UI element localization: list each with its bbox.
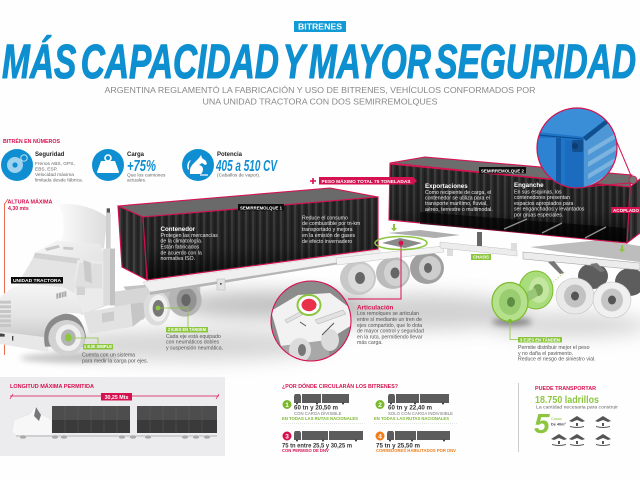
windshield [18, 258, 79, 288]
fairing [57, 204, 107, 248]
stat: carga: Que los camiones [127, 172, 166, 178]
text: contenedor: Protegen las mercancías [160, 233, 218, 239]
route 1: 1 [285, 402, 289, 409]
text: consumo: transportado y mejora [302, 227, 353, 233]
text: articulación: más carga. [357, 340, 383, 346]
stat: carga: +75% [127, 158, 156, 175]
label and text: 2 ejes en tándem: Cada eje está equipado [166, 334, 221, 340]
route 2: SOLO CON CARGA INDIVISIBLE [388, 411, 453, 416]
route 3: 75 tn entre 25,5 y 30,25 m [282, 442, 352, 450]
label and text: 3 ejes en tándem: Reduce el riesgo de siniestro vial. [518, 356, 596, 362]
height marker: altura máxima: ALTURA MÁXIMA [8, 198, 53, 206]
text: contenedor: Contenedor [160, 226, 196, 233]
route 1: EN TODAS LAS RUTAS NACIONALES [282, 416, 358, 421]
container 1 [118, 188, 378, 280]
weight label: peso máximo [310, 177, 417, 184]
text: exportaciones: transporte marítimo, fluvial, [425, 201, 488, 207]
heading: por dónde circularán: ¿POR DÓNDE CIRCULARÁN LOS BITRENES? [282, 382, 398, 390]
label and text: 1 eje simple: Cuenta con un sistema [82, 352, 135, 358]
green tandem axle [492, 271, 565, 340]
text: articulación: Articulación [357, 304, 394, 312]
text: articulación: en la ruta, permitiendo llevar [357, 334, 423, 340]
subtitle: ARGENTINA REGLAMENTÓ LA FABRICACIÓN Y USO DE BITRENES, VEHÍCULOS CONFORMADOS POR [104, 85, 536, 95]
panel: bitrén en números [1, 137, 278, 184]
stat: seguridad: Seguridad [35, 152, 65, 158]
label and text: 1 eje simple: para medir la carga por ejes. [82, 358, 148, 364]
route 1 [282, 394, 358, 421]
route 4: 4 [378, 433, 382, 440]
grille [0, 301, 11, 327]
stat: seguridad: Frenos ABS, GPS, [35, 161, 75, 167]
height marker: altura máxima: 4,30 mts [8, 206, 29, 212]
label: unidad tractora: UNIDAD TRACTORA [13, 278, 62, 283]
text: cantidad necesaria: La cantidad necesaria para construir [536, 404, 618, 410]
label: acoplado: ACOPLADO [613, 208, 640, 213]
height marker: altura máxima [4, 198, 53, 355]
subtitle [104, 85, 536, 106]
callout: articulación circle [270, 280, 352, 362]
stat: potencia: 405 a 510 CV [215, 158, 278, 175]
label and text: 2 ejes en tándem: con neumáticos dobles [166, 340, 219, 346]
ground shadows [20, 291, 640, 363]
tandem wheel front [143, 291, 170, 326]
container 2 [389, 157, 640, 243]
text: articulación: ejes compartido, que lo dota [357, 323, 422, 329]
stat: carga [92, 149, 166, 184]
cab body [20, 241, 108, 315]
route 2 [374, 394, 453, 421]
stat: seguridad: EBS, ESP. [35, 166, 58, 172]
hood [0, 283, 82, 343]
illustration: bitrén side view [12, 405, 217, 439]
panel: longitud máxima [0, 377, 225, 456]
text: exportaciones: Como recipiente de carga, el [425, 190, 491, 196]
semi-trailer 1 wheels [340, 252, 444, 295]
text: enganche: En sus esquinas, los [514, 189, 562, 195]
stat: seguridad [1, 149, 83, 184]
text: articulación [357, 304, 424, 346]
label: chasis [471, 254, 491, 260]
label and text: 2 ejes en tándem: y suspensión neumática. [166, 346, 223, 352]
bumper [0, 332, 49, 352]
text: enganche: espacios apropiados para [514, 201, 574, 207]
stat: seguridad: Velocidad máxima [35, 172, 74, 178]
hood vent [56, 291, 67, 299]
text: consumo: de combustible por tn-km [302, 221, 360, 227]
text: consumo [302, 216, 360, 245]
frame and fifth wheel [115, 287, 157, 320]
text: enganche: ser enganchados y levantados [514, 206, 585, 212]
label and text: 2 ejes en tándem [156, 306, 223, 352]
text: contenedor: Están fabricados [160, 244, 200, 250]
route 3: 3 [285, 433, 289, 440]
visor [33, 253, 80, 264]
text: enganche [514, 182, 585, 218]
text: exportaciones: contenedor se utiliza para el [425, 196, 490, 202]
dimension line: 30,25 mts [10, 393, 219, 401]
stat: 18.750 ladrillos: 18.750 ladrillos [535, 395, 599, 406]
label and text: 2 ejes en tándem: 2 EJES EN TÁNDEM [168, 327, 206, 332]
label and text: 1 eje simple: 1 EJE SIMPLE [84, 344, 112, 349]
white rear tandem wheels [556, 278, 631, 318]
route 3: CON PERMISO DE DNV [282, 448, 329, 453]
heading: longitud máxima: LONGITUD MÁXIMA PERMITIDA [10, 383, 94, 390]
text: contenedor: normativa ISO. [160, 256, 195, 262]
heading: puede transportar: PUEDE TRANSPORTAR [535, 386, 596, 392]
text: consumo: en la emisión de gases [302, 233, 355, 239]
stat: 5 casas [534, 408, 567, 439]
label: semirremolque 2: SEMIRREMOLQUE 2 [481, 168, 524, 173]
section tag: BITRENES: BITRENES [298, 23, 343, 32]
route 3 [282, 431, 363, 453]
semi-trailer 1 chassis [143, 250, 380, 295]
stat: seguridad: limitada desde fábrica. [35, 178, 83, 184]
text: contenedor: de la climatología. [160, 238, 202, 244]
text: articulación: Los remolques se articulan [357, 311, 419, 317]
label and text: 3 ejes en tándem: 3 EJES EN TÁNDEM [520, 337, 560, 342]
text: exportaciones: aéreo, terrestre o multimodal. [425, 207, 493, 213]
stat: 5 casas: 5 [534, 408, 550, 439]
text: enganche: contenedores presentan [514, 195, 570, 201]
text: consumo: Reduce el consumo [302, 216, 348, 222]
text: enganche: por grúas especiales. [514, 212, 563, 218]
text: exportaciones [425, 183, 493, 213]
panel: por dónde circularán [282, 382, 458, 453]
label and text: 3 ejes en tándem: Permite distribuir mejor el peso [518, 345, 590, 351]
label: semirremolque 1: SEMIRREMOLQUE 1 [240, 205, 282, 210]
semi-trailer 2 chassis [440, 232, 640, 296]
text: consumo: de efecto invernadero [302, 239, 352, 245]
route 1: CON CARGA DIVISIBLE [294, 411, 342, 416]
exhaust stack [106, 213, 111, 249]
stat: 5 casas: De 40m² [551, 422, 567, 426]
text: exportaciones: Exportaciones [425, 183, 468, 190]
dolly chassis beam [336, 230, 460, 265]
label: unidad tractora [11, 277, 63, 284]
tractor truck [0, 204, 202, 355]
label and text: 3 ejes en tándem [518, 337, 596, 362]
floor bars [504, 219, 606, 238]
dimension line: 30,25 mts: 30,25 Mts [105, 395, 128, 401]
text: contenedor: de acuerdo con la [160, 250, 202, 256]
front wheel [44, 314, 86, 355]
text: articulación: entre sí mediante un tren de [357, 317, 422, 323]
callout: articulación ring [348, 224, 625, 299]
route 4: CORREDORES HABILITADOS POR DNV [376, 448, 456, 453]
text: contenedor [160, 226, 218, 262]
route 4: 75 tn y 25,50 m [376, 442, 421, 450]
door and window [74, 260, 106, 314]
stat: carga: actuales. [127, 178, 146, 184]
route 4 [376, 431, 456, 453]
stat: 5 casas: Casas [551, 417, 562, 421]
subtitle: UNA UNIDAD TRACTORA CON DOS SEMIRREMOLQUES [202, 98, 438, 106]
route 2: EN TODAS LAS RUTAS NACIONALES [374, 416, 449, 421]
stat: potencia: (Caballos de vapor). [217, 172, 260, 178]
route 1: 60 tn y 20,50 m [294, 404, 339, 412]
label: chasis: CHASIS [473, 255, 489, 260]
heading: bitrén en números: BITRÉN EN NÚMEROS [3, 137, 60, 145]
icons: houses [551, 416, 611, 446]
weight label: peso máximo: PESO MÁXIMO TOTAL 75 TONELADAS [322, 178, 410, 184]
text: articulación: de mayor control y seguridad [357, 328, 424, 334]
rear tandem wheels [123, 280, 202, 317]
fuel tank [83, 304, 133, 334]
route 2: 60 tn y 22,40 m [388, 404, 433, 412]
label and text: 3 ejes en tándem: y no daña el pavimento. [518, 351, 573, 357]
stat: potencia: Potencia [217, 152, 243, 158]
stat: potencia [182, 149, 278, 181]
section tag: BITRENES [294, 21, 346, 32]
panel: puede transportar [534, 386, 618, 446]
text: enganche: Enganche [514, 182, 544, 189]
stat: carga: Carga [127, 152, 145, 158]
callout: container corner [535, 106, 637, 191]
label and text: 1 eje simple [72, 338, 148, 364]
route 2: 2 [378, 402, 382, 409]
